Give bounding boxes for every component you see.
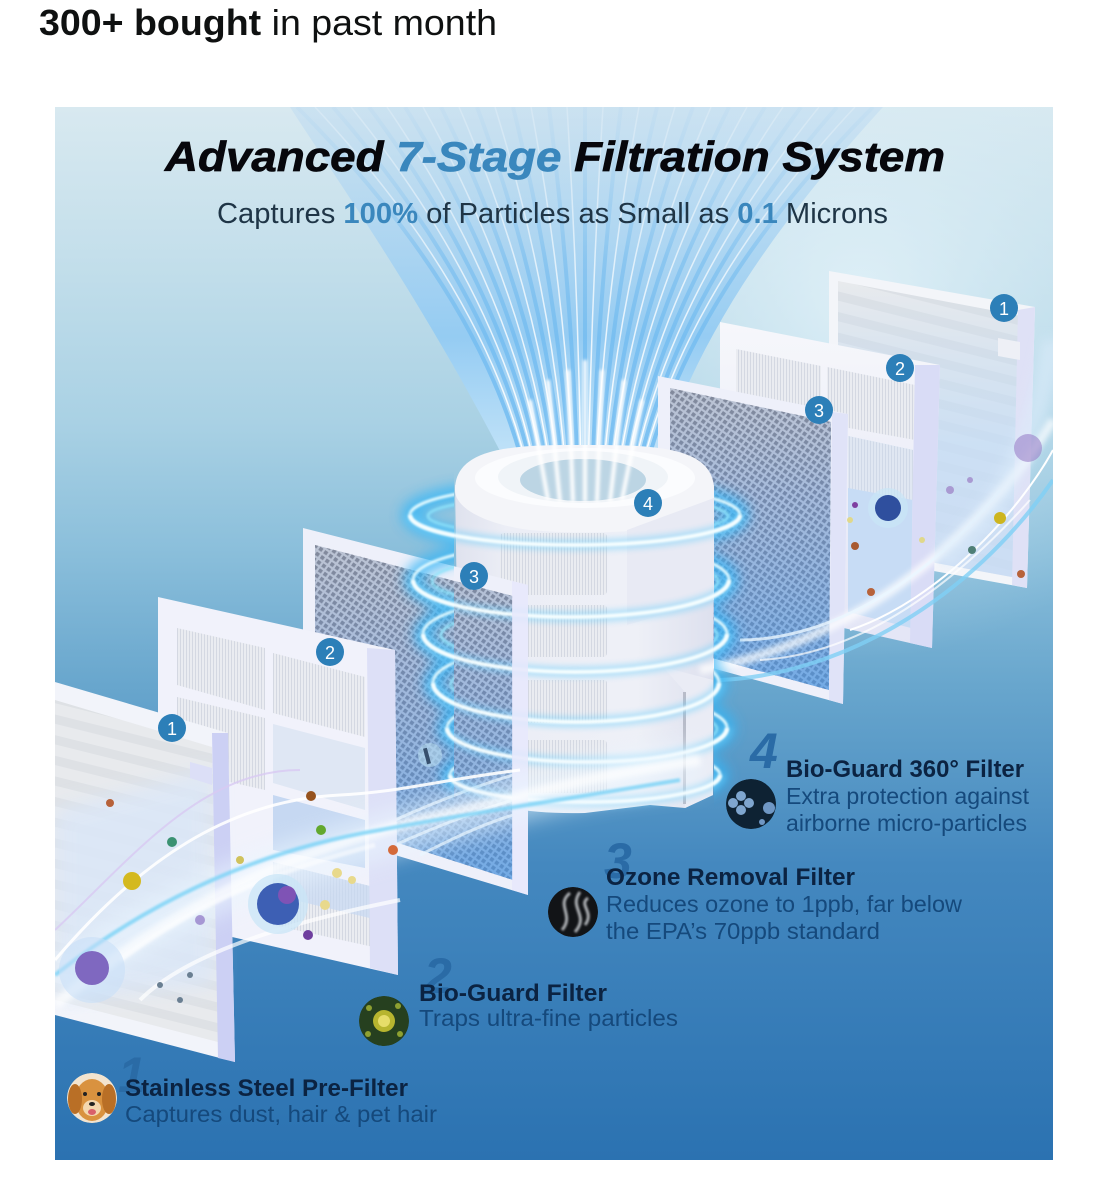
label: ozone removal filter: Reduces ozone to 1ppb, far below bbox=[606, 891, 962, 917]
front bio-guard filter bbox=[158, 597, 398, 975]
label: stainless steel pre-filter bbox=[67, 1058, 437, 1127]
badge 4: 4 bbox=[643, 494, 653, 514]
icon: smoke bbox=[548, 887, 598, 937]
back bio-guard filter bbox=[720, 322, 940, 648]
label: stainless steel pre-filter: Captures dust, hair & pet hair bbox=[125, 1101, 437, 1127]
back glow bands bbox=[700, 340, 1053, 680]
badge 3 front bbox=[460, 562, 488, 590]
label: ozone removal filter: 3 bbox=[604, 833, 632, 889]
label: ozone removal filter: the EPA’s 70ppb standard bbox=[606, 918, 880, 944]
label: bio-guard filter: 2 bbox=[423, 948, 452, 1004]
swirling air rings bbox=[410, 485, 740, 802]
icon: dog bbox=[67, 1073, 117, 1123]
white air wave through filters bbox=[55, 760, 700, 1005]
badge 3 front: 3 bbox=[469, 567, 479, 587]
label: stainless steel pre-filter: 1 bbox=[118, 1047, 146, 1103]
panel: filtration infographic bbox=[55, 107, 1053, 1160]
airflow core rays over filter opening bbox=[530, 360, 642, 502]
badge 1 back: 1 bbox=[999, 299, 1009, 319]
label: stainless steel pre-filter: Stainless Steel Pre-Filter bbox=[125, 1075, 408, 1102]
badge 3 back bbox=[805, 396, 833, 424]
badge 4 bbox=[634, 489, 662, 517]
label: bio-guard filter: Traps ultra-fine particles bbox=[419, 1005, 678, 1031]
badge 1 front bbox=[158, 714, 186, 742]
badge 1 front: 1 bbox=[167, 719, 177, 739]
subtitle: Captures 100% of Particles as Small as 0.1 Microns bbox=[217, 198, 888, 230]
label: bio-guard filter bbox=[359, 958, 678, 1046]
label: ozone removal filter: Ozone Removal Filter bbox=[606, 864, 855, 891]
airflow fan rising from the filter bbox=[290, 107, 882, 450]
front pre-filter bbox=[55, 682, 235, 1062]
badge 2 front: 2 bbox=[325, 643, 335, 663]
label: ozone removal filter bbox=[548, 833, 962, 944]
label: bio-guard 360 filter: Extra protection against bbox=[786, 783, 1030, 809]
back ozone filter bbox=[658, 376, 848, 704]
front ozone filter right frame bbox=[512, 581, 528, 895]
particles: back virus and dust bbox=[847, 434, 1042, 596]
cylindrical bio-guard 360 filter bbox=[455, 445, 714, 813]
badge 2 back: 2 bbox=[895, 359, 905, 379]
social proof line: 300+ bought in past month bbox=[39, 2, 497, 43]
front ozone filter bbox=[303, 528, 528, 895]
label: bio-guard filter: Bio-Guard Filter bbox=[419, 980, 607, 1007]
badge 2 front bbox=[316, 638, 344, 666]
particles: front virus and dust bbox=[59, 743, 442, 1003]
label: bio-guard 360 filter: airborne micro-particles bbox=[786, 810, 1027, 836]
title: Advanced 7-Stage Filtration System bbox=[164, 133, 945, 180]
badge 2 back bbox=[886, 354, 914, 382]
badge 3 back: 3 bbox=[814, 401, 824, 421]
badge 1 back bbox=[990, 294, 1018, 322]
back pre-filter bbox=[829, 271, 1035, 588]
label: bio-guard 360 filter bbox=[726, 723, 1030, 836]
label: bio-guard 360 filter: Bio-Guard 360° Filter bbox=[786, 756, 1024, 783]
icon: micro-particles bbox=[726, 779, 776, 829]
label: bio-guard 360 filter: 4 bbox=[749, 723, 778, 779]
icon: green microbe bbox=[359, 996, 409, 1046]
